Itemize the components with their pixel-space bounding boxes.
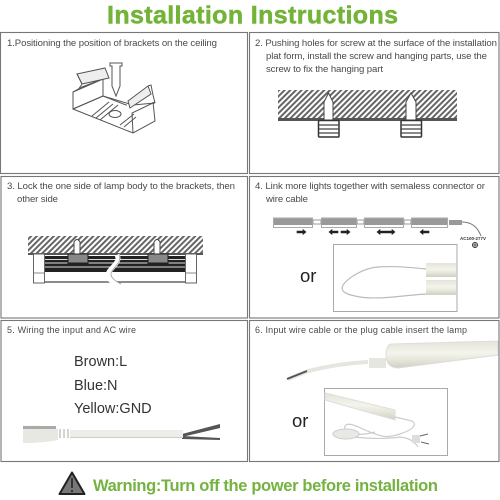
label: or: or <box>300 265 316 286</box>
step 1 text: 1.Positioning the position of brackets on the ceiling <box>7 38 217 49</box>
wire colour legend: Brown:L <box>74 354 127 370</box>
photo: lamp with input cable <box>287 341 498 379</box>
illustration: ceiling with screws <box>278 90 457 137</box>
step 2 text: screw to fix the hanging part <box>266 64 383 75</box>
panel: step 1 <box>0 32 248 174</box>
panel: step 4 <box>250 176 499 318</box>
panel: step 5 <box>1 320 248 462</box>
panel: step 3 <box>1 176 248 318</box>
wire colour legend <box>74 354 152 417</box>
step 6 text: 6. Input wire cable or the plug cable insert the lamp <box>255 325 467 335</box>
step 4 text: wire cable <box>265 194 308 205</box>
step 3 text <box>7 181 235 205</box>
step 3 text: 3. Lock the one side of lamp body to the brackets, then <box>7 181 235 192</box>
diagram: linked lights: AC100-277V <box>460 236 486 241</box>
icon: bracket and nail <box>73 63 155 133</box>
diagram: linked lights <box>274 218 486 248</box>
step 3 text: other side <box>17 194 58 205</box>
step 2 text: 2. Pushing holes for screw at the surface of the installation <box>255 38 497 49</box>
warning message <box>60 472 438 495</box>
title: Installation Instructions <box>107 2 398 30</box>
panel frame <box>1 176 248 318</box>
panel frame <box>0 32 248 174</box>
panel: step 2 <box>250 32 499 174</box>
wire colour legend: Yellow:GND <box>74 401 152 417</box>
panel frame <box>250 320 499 462</box>
label: or: or <box>292 410 308 431</box>
warning text: Warning:Turn off the power before installation <box>93 477 438 495</box>
step 5 text: 5. Wiring the input and AC wire <box>7 325 136 335</box>
wire colour legend: Blue:N <box>74 378 118 394</box>
step 4 text <box>255 181 486 205</box>
step 2 text <box>255 38 497 75</box>
photo: wire cable between lamps <box>334 244 457 312</box>
panel: step 6 <box>250 320 499 462</box>
illustration: lamp locked on brackets <box>28 236 203 286</box>
step 4 text: 4. Link more lights together with semaless connector or <box>255 181 486 192</box>
panel frame <box>250 176 499 318</box>
photo: lamp with plug cable <box>324 388 448 456</box>
icon: warning triangle <box>60 472 84 494</box>
step 2 text: plat form, install the screw and hanging parts, use the <box>266 51 487 62</box>
panel frame <box>1 320 248 462</box>
photo: input cable <box>23 424 220 443</box>
panel frame <box>250 32 499 174</box>
